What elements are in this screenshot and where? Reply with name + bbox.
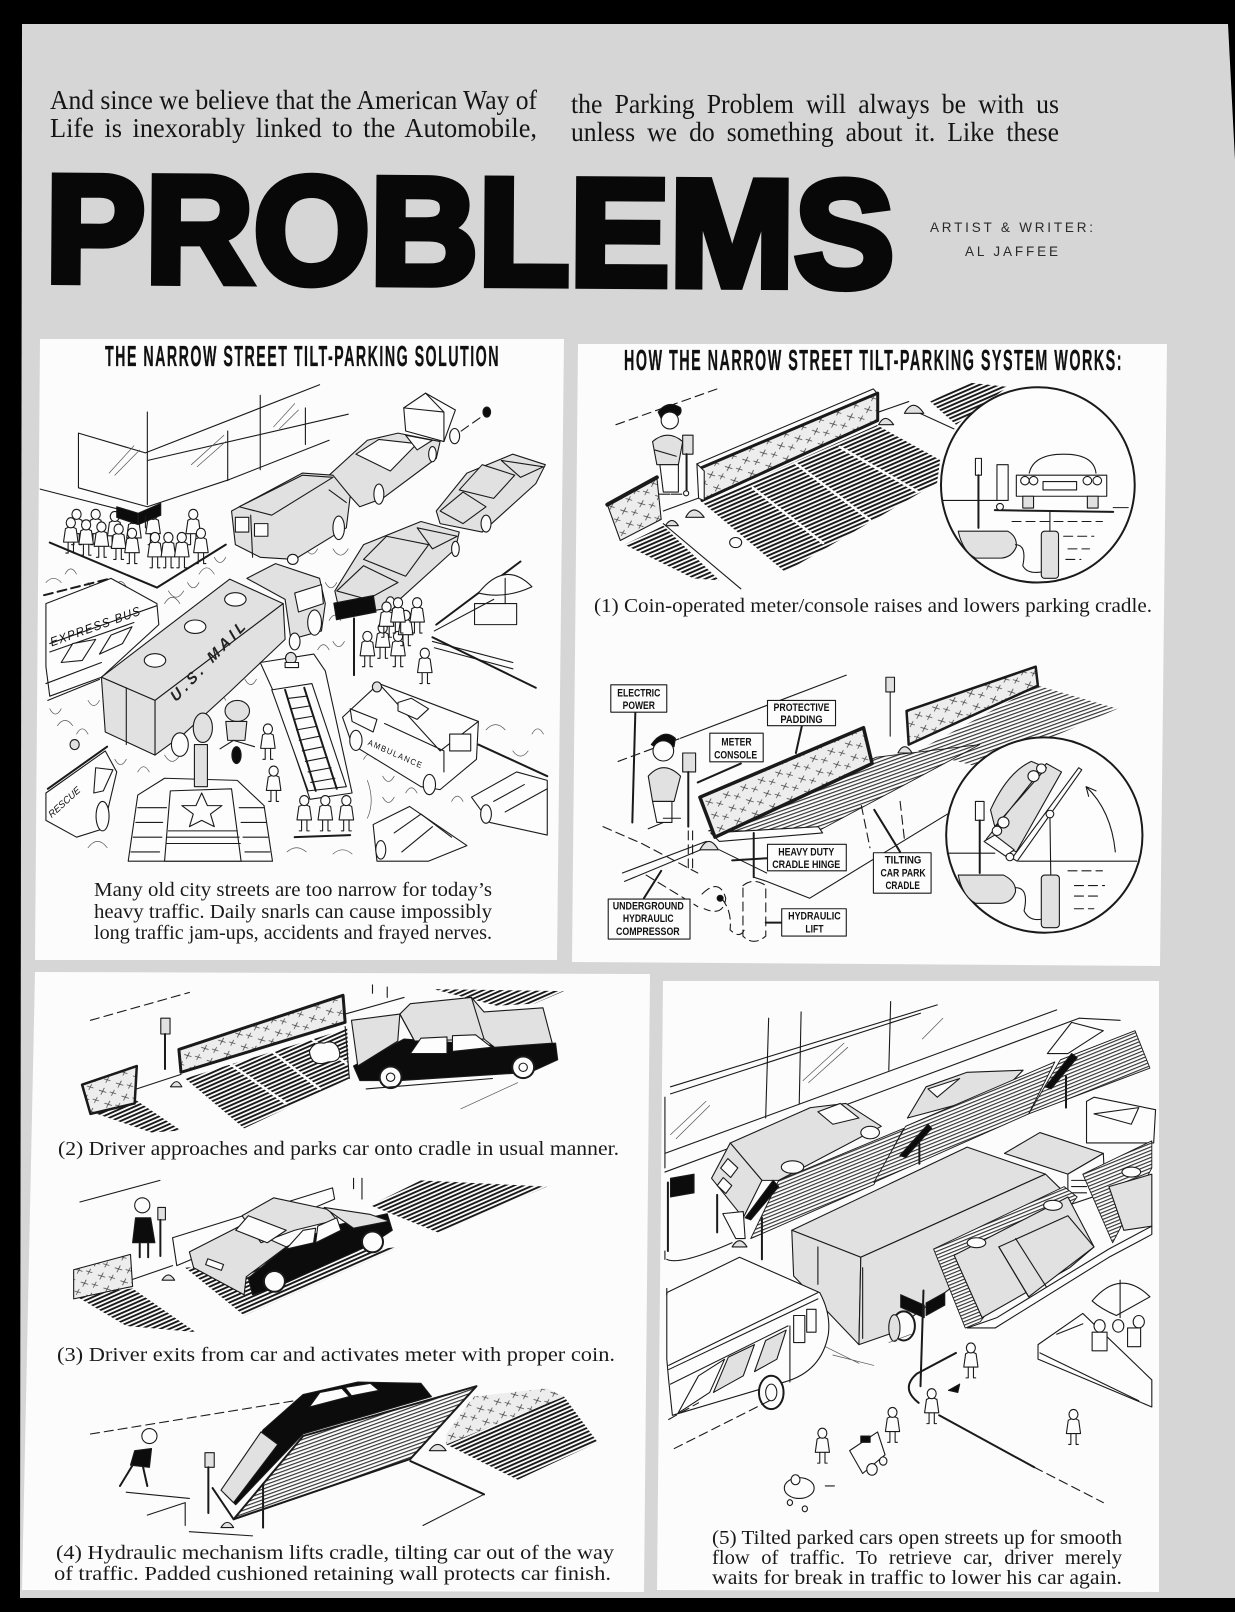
hinge and curb bump [700,833,754,877]
caption 5: waits for break in traffic to lower his car again. [712,1568,1122,1589]
crowd at corner [64,509,208,568]
label: heavy duty cradle hinge: CRADLE HINGE [772,859,841,871]
caption: long traffic jam-ups, accidents and frayed nerves. [94,923,492,944]
label: underground hydraulic compressor: COMPRESSOR [616,926,680,938]
curb and corner [909,1353,1034,1467]
label: tilting car park cradle: TILTING [885,855,921,867]
curb bumps [665,405,924,548]
sidewalk curb [48,543,547,789]
far crowd and sign [334,595,432,684]
black car parked [189,1198,392,1295]
label: heavy duty cradle hinge [768,844,846,871]
tilted car 2 [907,1070,1023,1118]
dog on leash [948,1384,960,1392]
tilted cradle [234,1386,476,1519]
express bus: EXPRESS BUS [48,604,142,650]
padded wall [607,389,878,540]
large truck [792,1147,1060,1345]
label: electric power: ELECTRIC [617,688,660,700]
label: tilting car park cradle: CRADLE [885,880,920,892]
figure 4 [90,1382,598,1536]
express bus [44,578,159,700]
far car and pickup [1047,1022,1156,1143]
label: underground hydraulic compressor [608,899,690,939]
credit: ARTIST & WRITER: [930,220,1093,235]
cafe umbrella [432,574,532,669]
cutaway circle: raised cradle [946,737,1142,933]
label: underground hydraulic compressor: HYDRAULIC [623,913,674,925]
label: protective padding [768,700,836,726]
building [665,1002,1120,1172]
label: meter console [710,733,763,762]
caption 2: (2) Driver approaches and parks car onto cradle in usual manner. [58,1139,619,1160]
label: electric power [611,685,667,712]
cutaway circle: lowered cradle [941,387,1135,583]
meter [683,435,693,496]
girl at meter [133,1198,165,1257]
panel: narrow street tilt-parking solution [35,339,564,960]
building [40,385,348,516]
car top [329,433,440,507]
padded wall [74,1178,362,1299]
caption: Many old city streets are too narrow for today’s [94,880,492,901]
label: meter console: CONSOLE [714,750,757,761]
tilted car in truck lane [934,1187,1152,1328]
label: hydraulic lift: HYDRAULIC [788,911,841,923]
car middle [335,522,459,616]
walk sign [668,1174,694,1251]
tilted cradles [745,1031,1150,1239]
cradles and street [90,989,564,1133]
label: hydraulic lift [782,909,846,936]
cradles and street [74,1180,547,1332]
man at console [648,734,681,829]
figure 2 [82,985,564,1133]
intro text: left column: Life is inexorably linked to the Automobile, [50,113,537,143]
tilted van [712,1103,881,1218]
caption 1: (1) Coin-operated meter/console raises and lowers parking cradle. [594,596,1152,617]
caption: heavy traffic. Daily snarls can cause impossibly [94,902,492,923]
label: underground hydraulic compressor: UNDERGROUND [613,901,684,913]
baby carriage [850,1432,887,1475]
credit [930,220,1093,259]
caption 4 [54,1543,614,1585]
tank [128,713,272,861]
street sign [901,1291,945,1386]
caption 3: (3) Driver exits from car and activates meter with proper coin. [57,1345,615,1366]
label: tilting car park cradle: CAR PARK [881,867,926,879]
padded wall [82,985,387,1114]
girl walking [120,1429,157,1486]
cars bottom right [373,772,547,861]
underground hydraulics [688,801,947,941]
label: heavy duty cradle hinge: HEAVY DUTY [778,846,834,858]
figure 1 [607,383,1135,589]
ambulance: AMBULANCE [367,738,424,770]
street sign [117,503,161,528]
tilted car [221,1382,431,1505]
title: PROBLEMS [45,144,895,320]
rescue vehicle: RESCUE [47,784,83,821]
label: hydraulic lift: LIFT [805,923,823,935]
delivery trailer [404,393,491,444]
child on scooter [784,1475,837,1512]
street and cradles [616,383,1008,589]
intro text: left column: And since we believe that the American Way of [50,85,537,115]
caption 4: (4) Hydraulic mechanism lifts cradle, tilting car out of the way [56,1543,614,1564]
panel: tilted parked cars [657,981,1159,1592]
motorcycle [220,700,254,764]
ambulance [343,682,478,795]
fire truck and ladder [260,652,352,799]
far cradle and wall [886,667,1117,768]
van [232,473,350,564]
meters and posts [665,1076,1066,1261]
pedestrians [815,1343,1081,1463]
car right [436,454,545,532]
firemen [261,724,354,837]
label: meter console: METER [721,737,752,748]
figure: labelled diagram [603,667,1142,941]
panel: steps 2 to 4 [22,972,650,1592]
label: protective padding: PROTECTIVE [774,702,830,714]
label: tilting car park cradle [873,853,931,893]
intro text: right column: the Parking Problem will always be with us [571,89,1059,119]
intro text: right column: unless we do something about it. Like these [571,117,1059,147]
intro text: left column [50,85,537,143]
credit: AL JAFFEE [965,244,1058,259]
traffic jam illustration [40,385,547,861]
exhaust cloud [309,1042,340,1064]
street lines [603,675,846,907]
meter and hinge [205,1444,446,1528]
caption 4: of traffic. Padded cushioned retaining wall protects car finish. [54,1564,611,1585]
caption [94,880,492,944]
figure 3 [74,1178,547,1332]
label: electric power: POWER [623,700,655,712]
meter [161,1018,170,1069]
black car approaching [345,997,558,1109]
rescue vehicle [46,740,117,837]
tilted cradle [700,728,980,841]
traffic squiggles [46,544,543,854]
panel: narrow street tilt-parking solution: THE NARROW STREET TILT-PARKING SOLUTION [105,341,500,373]
street scene illustration [665,1002,1156,1512]
intro text: right column [571,89,1059,147]
caption 5 [712,1528,1122,1589]
road shadow [825,1334,911,1365]
caption 5: flow of traffic. To retrieve car, driver merely [712,1548,1122,1569]
U.S. mail truck: U.S. MAIL [167,618,249,706]
cafe [1038,1280,1152,1407]
street and far cradle [90,1388,598,1536]
caption 5: (5) Tilted parked cars open streets up for smooth [712,1528,1122,1549]
bus [667,1257,829,1449]
right tilted car [1083,1141,1152,1243]
panel: how the system works [572,344,1167,966]
label: protective padding: PADDING [780,714,823,726]
truck cab [1004,1133,1105,1205]
meter console [683,753,696,827]
man at meter [653,404,683,494]
U.S. mail truck [101,564,325,756]
leader lines [632,712,900,923]
